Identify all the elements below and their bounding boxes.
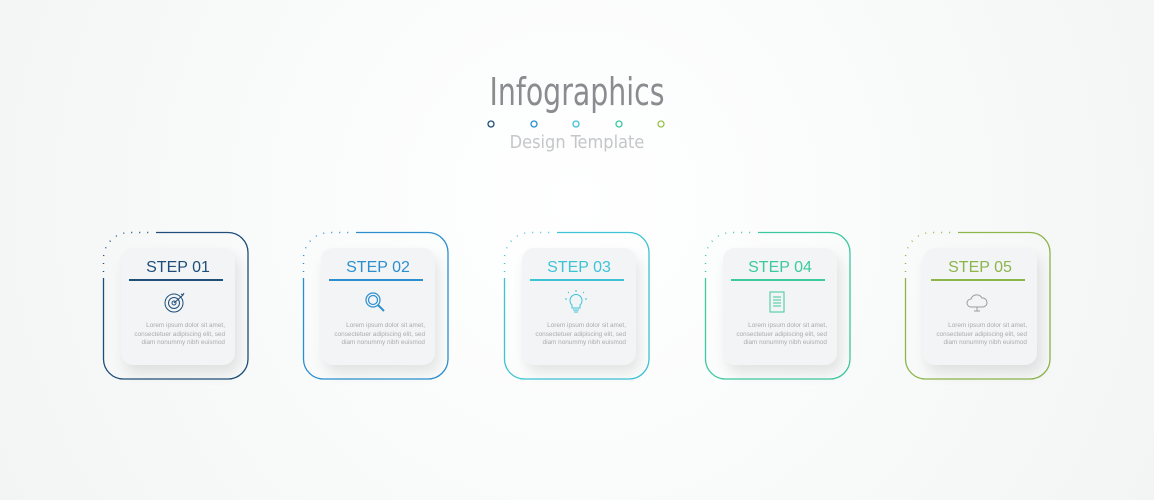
step 03: Lorem ipsum dolor sit amet, xyxy=(547,322,626,329)
step 04 xyxy=(704,232,851,380)
step 02: Lorem ipsum dolor sit amet, xyxy=(346,322,425,329)
step 01 xyxy=(102,232,249,380)
step 04: STEP 04 xyxy=(748,259,812,276)
step 02: diam nonummy nibh euismod xyxy=(342,339,425,346)
dots row xyxy=(487,120,665,128)
step 04: Lorem ipsum dolor sit amet, xyxy=(748,322,827,329)
icon: document xyxy=(770,292,784,312)
icon: target xyxy=(164,292,184,312)
step 05: consectetuer adipiscing elit, sed xyxy=(936,330,1027,338)
step 04: consectetuer adipiscing elit, sed xyxy=(736,330,827,338)
subtitle: Design Template xyxy=(510,132,644,153)
step 03 xyxy=(504,232,650,380)
step 02: STEP 02 xyxy=(346,259,410,276)
icon: bulb xyxy=(565,290,587,312)
step 05: Lorem ipsum dolor sit amet, xyxy=(948,322,1027,329)
step 01: diam nonummy nibh euismod xyxy=(142,339,225,346)
step 02 xyxy=(302,232,449,380)
step 05: diam nonummy nibh euismod xyxy=(944,339,1027,346)
step 05 xyxy=(904,232,1051,380)
step 01: STEP 01 xyxy=(146,259,210,276)
step 03: STEP 03 xyxy=(547,259,611,276)
step 03: consectetuer adipiscing elit, sed xyxy=(535,330,626,338)
icon: cloud xyxy=(966,294,988,312)
step 04: diam nonummy nibh euismod xyxy=(744,339,827,346)
step 05: STEP 05 xyxy=(948,259,1012,276)
step 01: consectetuer adipiscing elit, sed xyxy=(134,330,225,338)
step 02: consectetuer adipiscing elit, sed xyxy=(334,330,425,338)
step 01: Lorem ipsum dolor sit amet, xyxy=(146,322,225,329)
title: Infographics xyxy=(489,70,665,114)
icon: magnifier xyxy=(365,292,385,312)
step 03: diam nonummy nibh euismod xyxy=(543,339,626,346)
